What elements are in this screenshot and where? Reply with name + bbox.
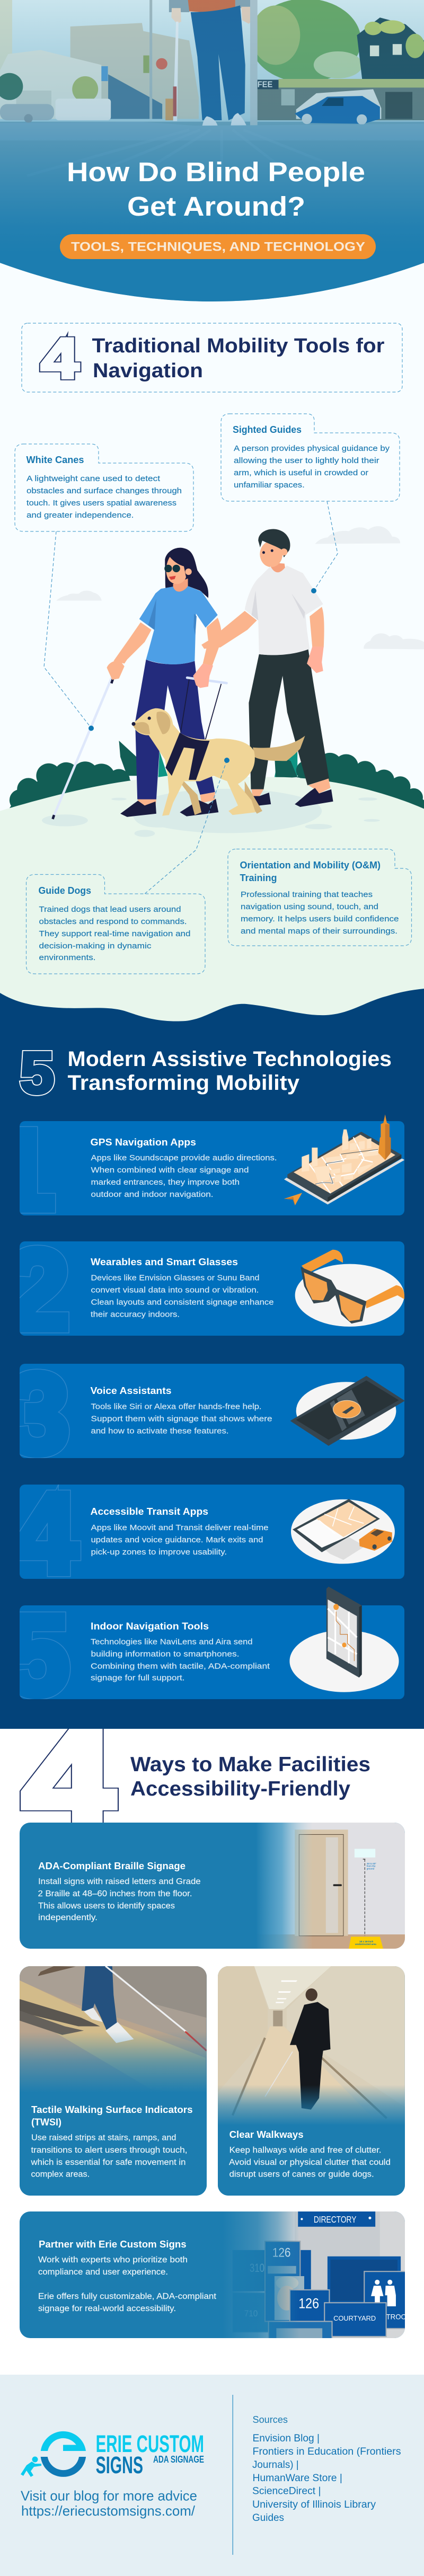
section 3 heading: 4 [23, 1702, 115, 1855]
section 1 heading box: Navigation [93, 360, 203, 382]
footer divider [232, 2395, 233, 2555]
card 2: Wearables and Smart Glasses: Clean layouts and consistent signage enhance [91, 1298, 273, 1307]
title: How Do Blind People [67, 157, 365, 187]
card 3: Voice Assistants: Tools like Siri or Alexa offer hands-free help. [91, 1402, 262, 1411]
card 3: Voice Assistants: 3 [6, 1349, 69, 1477]
illustration: white cane [52, 664, 118, 819]
sources list: Frontiers in Education (Frontiers [252, 2446, 401, 2457]
card 2: Wearables and Smart Glasses [20, 1241, 404, 1336]
section 1 heading box: 4 [41, 326, 78, 390]
panel: Partner with Erie Custom Signs: Work with experts who prioritize both [38, 2255, 188, 2264]
callout: Sighted Guides: allowing the user to lightly hold their [234, 456, 379, 465]
callout: Orientation and Mobility Training: Orientation and Mobility (O&M) [240, 860, 381, 870]
card 4: Accessible Transit Apps: Accessible Transit Apps [90, 1506, 208, 1517]
section 3 heading: Ways to Make Facilities [130, 1753, 370, 1776]
card 4: Accessible Transit Apps: Apps like Moovit and Transit deliver real-time [91, 1523, 268, 1532]
sources list [252, 2414, 401, 2524]
card 3: Voice Assistants: 3 [6, 1349, 69, 1477]
section 1 heading box: Traditional Mobility Tools for [92, 335, 385, 357]
card 5: Indoor Navigation Tools: building information to smartphones. [91, 1650, 240, 1659]
connector: sighted guide [311, 501, 338, 593]
panel: Partner with Erie Custom Signs [20, 2210, 407, 2341]
panel: ADA-Compliant Braille Signage: 48 to 60" [367, 1862, 376, 1866]
card 1: GPS Navigation Apps: marked entrances, they improve both [91, 1178, 240, 1187]
panel: Partner with Erie Custom Signs: 126 [272, 2246, 290, 2260]
card 4: Accessible Transit Apps: 4 [14, 1469, 77, 1597]
card 2: Wearables and Smart Glasses: convert visual data into sound or vibration. [91, 1285, 259, 1295]
connector: guide dog [145, 758, 229, 894]
illustration: sighted guide man [201, 529, 333, 807]
panel: Partner with Erie Custom Signs: 710 [244, 2309, 258, 2319]
icon: transit app and car [291, 1499, 395, 1564]
icon: phone with microphone [290, 1376, 405, 1446]
callout: White Canes: A lightweight cane used to detect [26, 474, 161, 483]
callout: Guide Dogs: environments. [39, 953, 95, 962]
card 1: GPS Navigation Apps [20, 1121, 404, 1215]
card 2: Wearables and Smart Glasses: Devices like Envision Glasses or Sunu Band [91, 1274, 260, 1283]
panel: ADA-Compliant Braille Signage [20, 1823, 405, 1950]
callout: White Canes [15, 444, 193, 531]
panel: Partner with Erie Custom Signs: signage for real-world accessibility. [38, 2304, 176, 2313]
card 5: Indoor Navigation Tools: Technologies like NaviLens and Aira send [91, 1638, 253, 1647]
blog call to action [21, 2488, 197, 2519]
card 2: Wearables and Smart Glasses: their accuracy indoors. [91, 1310, 180, 1319]
icon: indoor navigation phone [289, 1587, 399, 1692]
section 2 heading: Transforming Mobility [68, 1071, 300, 1095]
sources list: Journals) | [252, 2459, 299, 2471]
card 4: Accessible Transit Apps: updates and voice guidance. Mark exits and [91, 1535, 263, 1544]
card 1: GPS Navigation Apps: When combined with clear signage and [91, 1166, 249, 1175]
callout: Orientation and Mobility Training [228, 849, 411, 946]
section 1 heading box: 4 [41, 326, 78, 390]
callout: Sighted Guides: Sighted Guides [233, 424, 302, 435]
card 5: Indoor Navigation Tools [20, 1605, 404, 1699]
panel: Partner with Erie Custom Signs: TROO [386, 2313, 407, 2321]
hero photo: pedestrian with white cane on a street: FEE [258, 80, 272, 89]
subtitle pill [60, 234, 376, 259]
panel: Partner with Erie Custom Signs: 310 [250, 2261, 264, 2275]
icon: isometric city map phone [284, 1114, 404, 1205]
callout: Guide Dogs: Guide Dogs [38, 885, 91, 896]
connector: white cane [44, 531, 94, 731]
section 3 heading: Accessibility-Friendly [130, 1778, 350, 1800]
panel: ADA-Compliant Braille Signage: ADA-Compliant Braille Signage [38, 1861, 186, 1871]
card 5: Indoor Navigation Tools: signage for full support. [91, 1673, 184, 1683]
panel: Partner with Erie Custom Signs: 126 [298, 2295, 319, 2312]
panel: Tactile Walking Surface Indicators: complex areas. [31, 2170, 90, 2179]
card 4: Accessible Transit Apps: pick-up zones to improve usability. [91, 1548, 227, 1557]
sources list: Envision Blog | [252, 2433, 320, 2444]
panel: Tactile Walking Surface Indicators: Use raised strips at stairs, ramps, and [31, 2134, 176, 2143]
callout: Sighted Guides: unfamiliar spaces. [234, 481, 305, 490]
panel: ADA-Compliant Braille Signage: Install signs with raised letters and Grade [38, 1877, 201, 1886]
panel: Tactile Walking Surface Indicators: transitions to alert users through touch, [31, 2146, 188, 2155]
panel: Partner with Erie Custom Signs: COURTYARD [333, 2314, 376, 2322]
card 4: Accessible Transit Apps: 4 [14, 1469, 77, 1597]
panel: Clear Walkways: disrupt users of canes or guide dogs. [229, 2170, 374, 2179]
panel: Tactile Walking Surface Indicators: which is essential for safe movement in [30, 2158, 186, 2167]
sources list: University of Illinois Library [252, 2499, 376, 2510]
panel: ADA-Compliant Braille Signage: 18 x 18-inch [359, 1940, 373, 1943]
card 3: Voice Assistants: and how to activate these features. [91, 1426, 229, 1435]
panel: Clear Walkways: Clear Walkways [229, 2129, 304, 2140]
callout: White Canes: obstacles and surface changes through [26, 486, 182, 495]
panel: ADA-Compliant Braille Signage: from the [367, 1865, 376, 1868]
card 5: Indoor Navigation Tools: Indoor Navigation Tools [91, 1621, 209, 1632]
callout: Guide Dogs: obstacles and respond to commands. [39, 917, 187, 926]
section 3 white background [0, 1729, 424, 2375]
sources list: Sources [252, 2414, 288, 2425]
panel: Partner with Erie Custom Signs: DIRECTORY [314, 2214, 357, 2225]
panel: Clear Walkways: Avoid visual or physical clutter that could [229, 2158, 391, 2167]
title [67, 157, 365, 221]
panel: Partner with Erie Custom Signs: compliance and user experience. [38, 2268, 168, 2277]
callout: Orientation and Mobility Training: and mental maps of their surroundings. [241, 927, 398, 936]
section 2 heading [20, 1041, 392, 1106]
panel: ADA-Compliant Braille Signage: ground [367, 1867, 374, 1871]
card 3: Voice Assistants: Voice Assistants [90, 1385, 172, 1396]
card 5: Indoor Navigation Tools: Combining them with tactile, ADA-compliant [91, 1662, 270, 1671]
panel: Partner with Erie Custom Signs: Partner with Erie Custom Signs [39, 2239, 187, 2250]
panel: ADA-Compliant Braille Signage: This allows users to identify spaces [38, 1902, 175, 1911]
section 3 heading [23, 1702, 370, 1855]
callout: White Canes: and greater independence. [26, 511, 134, 520]
footer background [0, 2375, 424, 2576]
section 2 heading: Modern Assistive Technologies [68, 1047, 392, 1071]
card 5: Indoor Navigation Tools: 5 [6, 1591, 69, 1719]
card 3: Voice Assistants [20, 1364, 404, 1458]
blog call to action: Visit our blog for more advice [21, 2488, 197, 2504]
blog call to action: https://eriecustomsigns.com/ [21, 2503, 196, 2519]
section 1 heading box [22, 323, 402, 392]
callout: Guide Dogs: decision-making in dynamic [39, 941, 152, 951]
title: Get Around? [127, 191, 305, 221]
card 3: Voice Assistants: Support them with signage that shows where [91, 1414, 272, 1423]
sources list: Guides [252, 2512, 284, 2524]
section 2 heading: 5 [20, 1041, 54, 1106]
logo: Erie Custom Signs [21, 2430, 204, 2479]
logo: Erie Custom Signs: ADA SIGNAGE [153, 2454, 204, 2465]
section 2 navy background with wave top [0, 989, 424, 1729]
callout: Guide Dogs: Trained dogs that lead users around [39, 905, 181, 914]
panel: Clear Walkways: Keep hallways wide and free of clutter. [229, 2146, 382, 2155]
illustration: guide dog with harness [131, 664, 305, 816]
panel: Tactile Walking Surface Indicators: (TWSI) [31, 2117, 61, 2128]
callout: Orientation and Mobility Training: Training [240, 873, 277, 883]
callout: Sighted Guides: arm, which is useful in crowded or [234, 468, 368, 477]
section 3 heading: 4 [23, 1702, 115, 1855]
subtitle pill: TOOLS, TECHNIQUES, AND TECHNOLOGY [71, 239, 365, 254]
illustration: woman with sunglasses [107, 548, 222, 817]
callout: White Canes: touch. It gives users spatial awareness [26, 499, 176, 508]
card 5: Indoor Navigation Tools: 5 [6, 1591, 69, 1719]
callout: Sighted Guides: A person provides physical guidance by [234, 444, 390, 453]
logo: Erie Custom Signs: ERIE CUSTOM [96, 2430, 204, 2457]
panel: Partner with Erie Custom Signs: Erie offers fully customizable, ADA-compliant [38, 2292, 217, 2301]
panel: ADA-Compliant Braille Signage: independently. [38, 1913, 98, 1922]
panel: ADA-Compliant Braille Signage: 2 Braille at 48–60 inches from the floor. [38, 1889, 192, 1898]
callout: Orientation and Mobility Training: Professional training that teaches [241, 890, 373, 899]
callout: White Canes: White Canes [26, 455, 84, 465]
card 2: Wearables and Smart Glasses: 2 [6, 1225, 69, 1353]
callout: Guide Dogs [26, 874, 205, 974]
card 4: Accessible Transit Apps [20, 1485, 404, 1579]
icon: smart glasses [295, 1250, 404, 1327]
section 2 heading: 5 [20, 1041, 54, 1106]
ground and hill with bushes [0, 526, 424, 1046]
card 1: GPS Navigation Apps: GPS Navigation Apps [90, 1137, 196, 1148]
logo: Erie Custom Signs: SIGNS [96, 2451, 143, 2479]
panel: Tactile Walking Surface Indicators [20, 1966, 207, 2196]
panel: ADA-Compliant Braille Signage: unobstructed area [355, 1943, 376, 1946]
callout: Orientation and Mobility Training: navigation using sound, touch, and [241, 902, 378, 911]
panel: Clear Walkways [218, 1966, 405, 2196]
card 2: Wearables and Smart Glasses: Wearables and Smart Glasses [91, 1257, 238, 1267]
sources list: ScienceDirect | [252, 2486, 321, 2497]
sources list: HumanWare Store | [252, 2473, 342, 2484]
card 1: GPS Navigation Apps: outdoor and indoor navigation. [91, 1190, 213, 1199]
callout: Guide Dogs: They support real-time navigation and [39, 929, 191, 938]
callout: Sighted Guides [221, 414, 400, 501]
panel: Tactile Walking Surface Indicators: Tactile Walking Surface Indicators [31, 2104, 193, 2115]
hero photo: pedestrian with white cane on a street [0, 0, 424, 301]
card 2: Wearables and Smart Glasses: 2 [6, 1225, 69, 1353]
card 1: GPS Navigation Apps: Apps like Soundscape provide audio directions. [91, 1153, 277, 1162]
callout: Orientation and Mobility Training: memory. It helps users build confidence [241, 914, 399, 923]
